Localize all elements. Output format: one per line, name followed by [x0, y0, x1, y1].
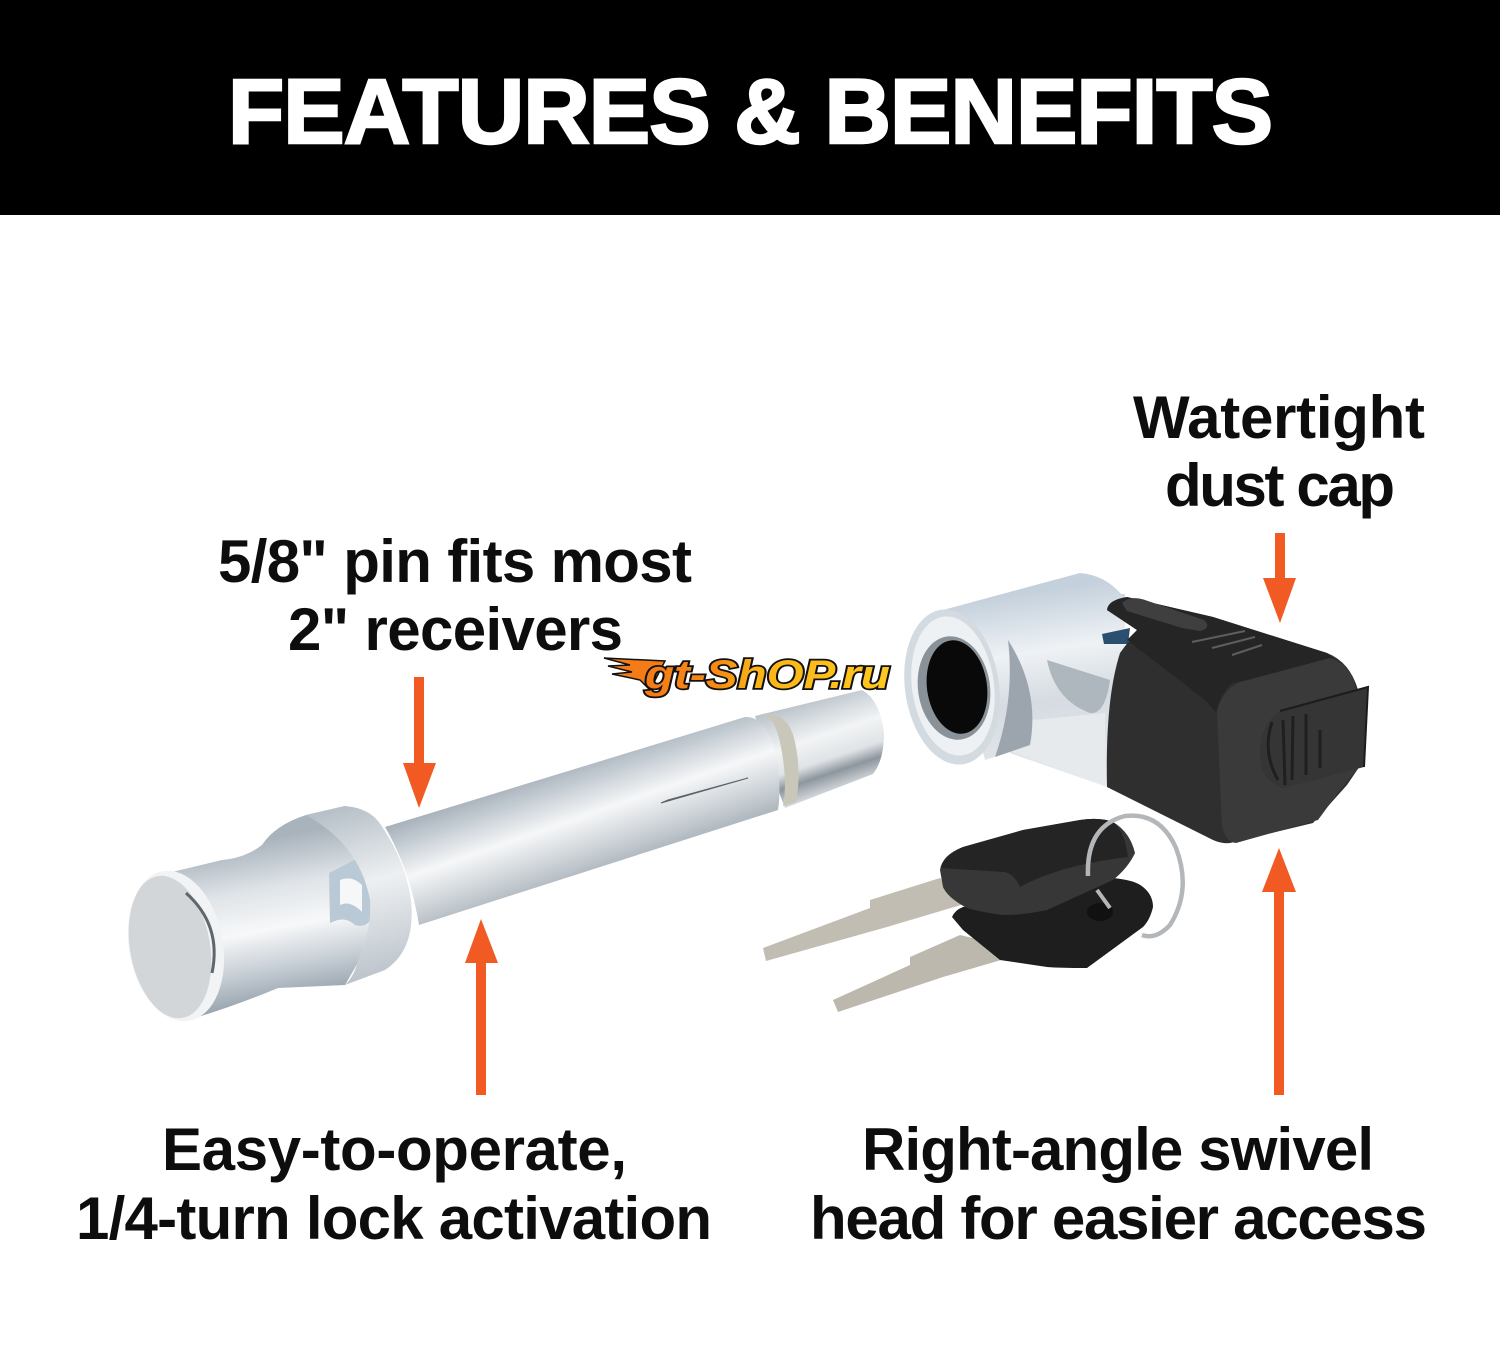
- upper key fob: [940, 819, 1135, 915]
- pin head face: [117, 863, 235, 1029]
- label: swivel head: [810, 1116, 1427, 1252]
- keyway hole: [911, 631, 997, 745]
- lower key fob: [952, 878, 1153, 968]
- arrow: lock activation: [465, 919, 498, 1095]
- product: lock head: [895, 573, 1368, 843]
- sliding button: [1122, 598, 1207, 631]
- title: FEATURES & BENEFITS: [228, 61, 1273, 163]
- label: lock activation: [76, 1116, 712, 1252]
- receiver ring: [895, 603, 1009, 771]
- product: hitch pin: [117, 690, 884, 1029]
- label: pin: [218, 528, 692, 663]
- label: pin: 5/8" pin fits most: [218, 528, 692, 595]
- dust cap top face: [1107, 597, 1340, 712]
- pin collar ring: [306, 806, 412, 985]
- pin end collar: [755, 690, 884, 808]
- label: lock activation: 1/4-turn lock activation: [76, 1185, 712, 1252]
- tab ribs: [1268, 714, 1320, 785]
- label: dust cap: Watertight: [1133, 384, 1425, 451]
- arrow: dust cap: [1263, 533, 1296, 623]
- label: swivel head: head for easier access: [810, 1185, 1427, 1252]
- title banner: [0, 0, 1500, 215]
- dust cap front face: [1217, 658, 1361, 843]
- dust cap pull tab: [1260, 687, 1368, 788]
- arrow: swivel head: [1262, 848, 1296, 1095]
- dust cap top and side: [1107, 597, 1364, 843]
- key ring: [1088, 816, 1183, 936]
- back key blade: [833, 935, 1010, 1012]
- label: lock activation: Easy-to-operate,: [162, 1116, 627, 1183]
- label: dust cap: [1133, 384, 1425, 519]
- chrome collar bulge: [995, 640, 1032, 757]
- label: dust cap: dust cap: [1165, 452, 1395, 519]
- watermark flame: [604, 658, 665, 690]
- label: swivel head: Right-angle swivel: [862, 1116, 1374, 1183]
- chrome body: [1007, 593, 1125, 790]
- blue tab window: [1102, 628, 1130, 644]
- product: keys: [763, 816, 1183, 1012]
- front key blade: [763, 878, 961, 961]
- watermark text: gt-ShOP.ru: [644, 653, 890, 697]
- arrow: pin diameter: [403, 677, 436, 808]
- chrome cylinder: [943, 573, 1125, 760]
- top arrow ribs: [1192, 631, 1262, 655]
- pin grip: [150, 806, 400, 1018]
- pin shaft: [385, 717, 779, 925]
- watermark logo: [604, 653, 890, 697]
- label: pin: 2" receivers: [288, 596, 623, 663]
